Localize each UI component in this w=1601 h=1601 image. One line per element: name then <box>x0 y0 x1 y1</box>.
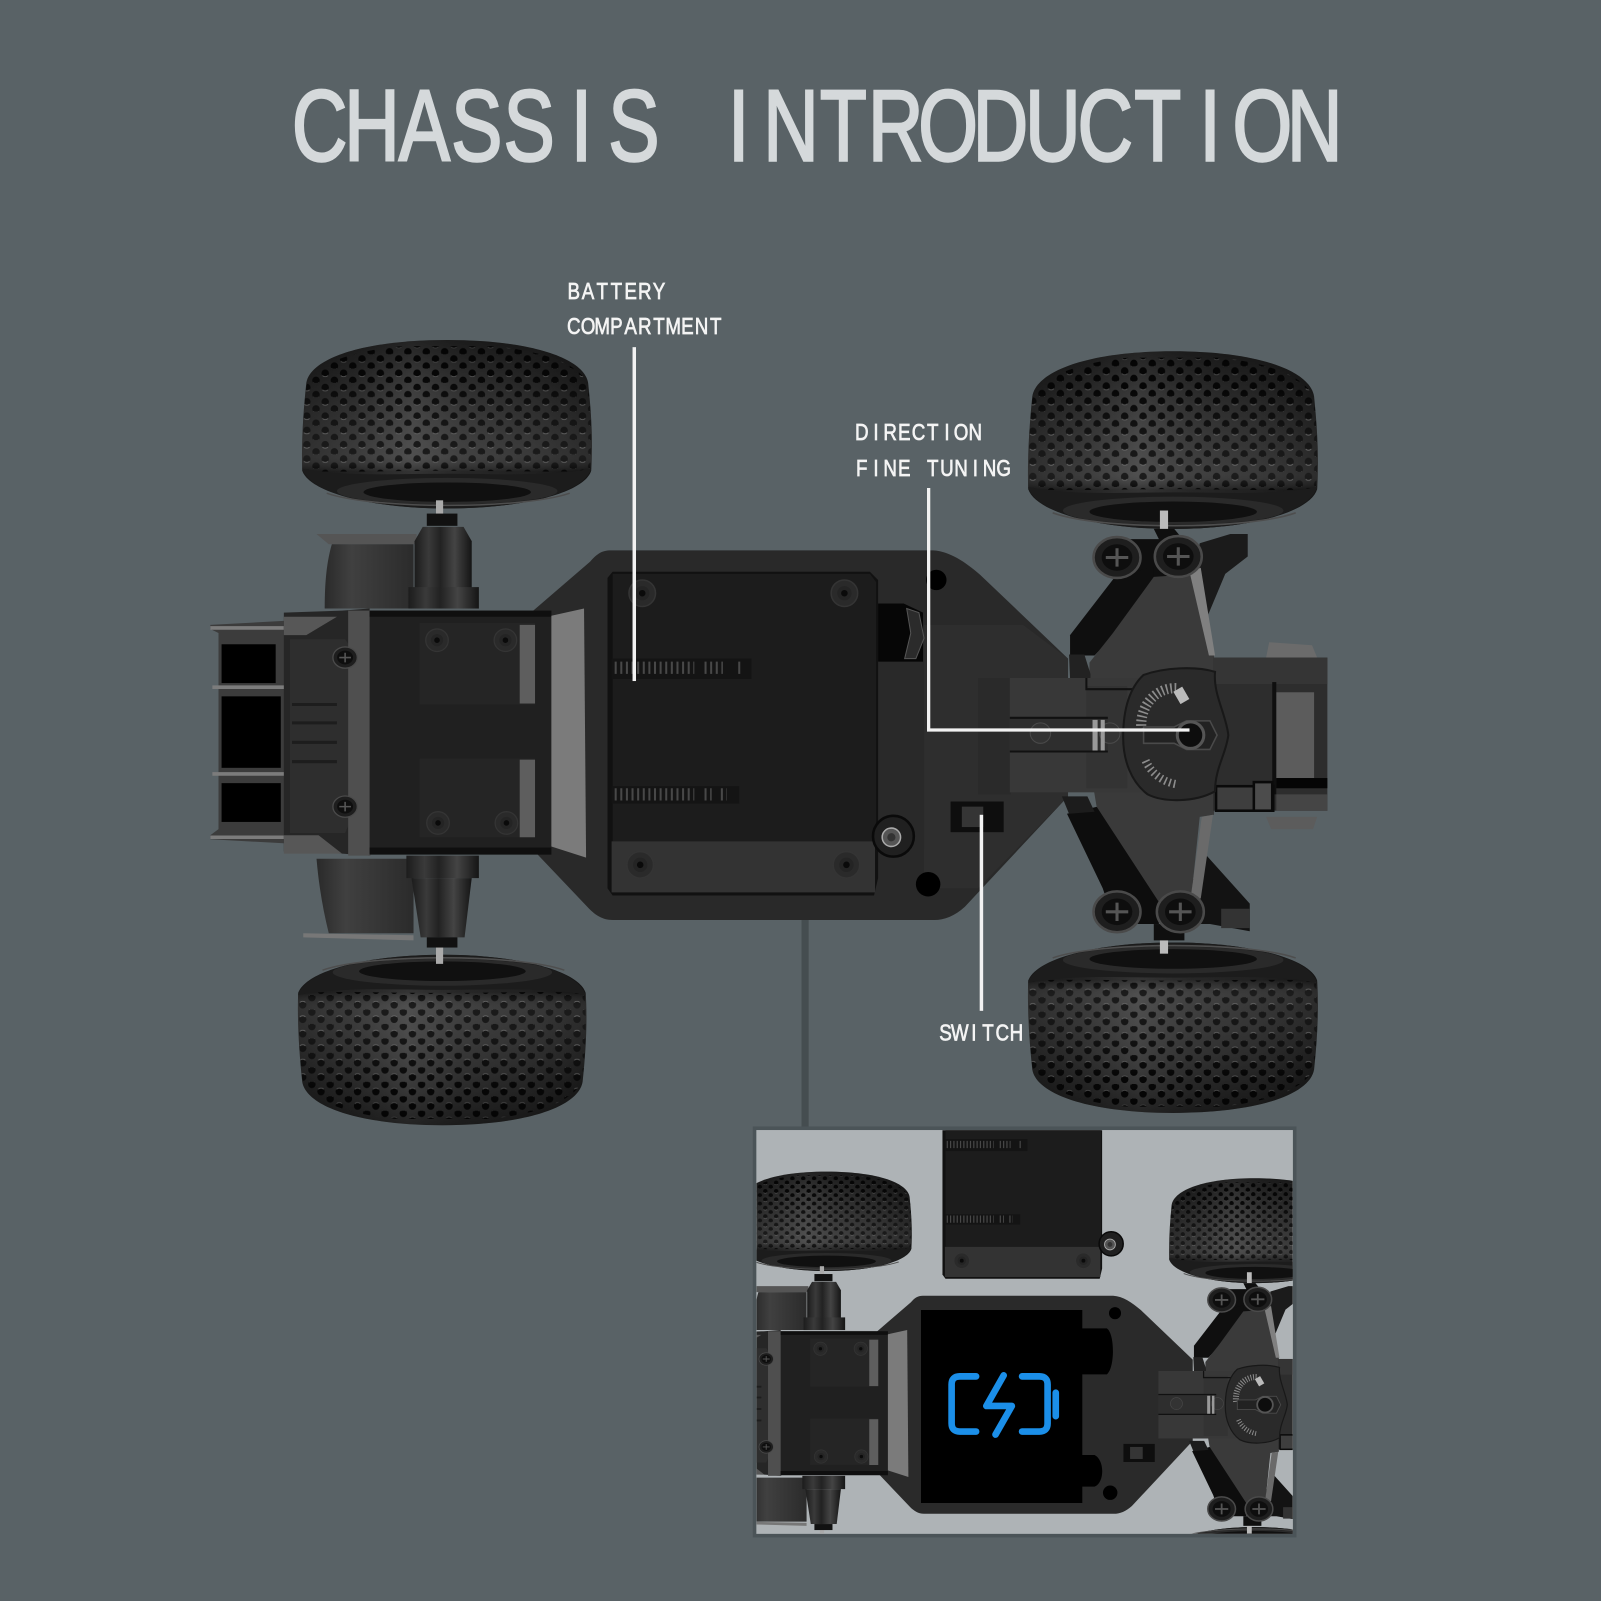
chassis plate <box>531 550 1068 920</box>
label: switch: SWITCH <box>939 1019 1023 1046</box>
icon: blue charging battery <box>952 1375 1056 1435</box>
rear axle with tires <box>210 340 592 1125</box>
inset panel: open battery compartment <box>753 1126 1296 1538</box>
inset chassis <box>756 1172 1293 1534</box>
open battery bay <box>921 1310 1113 1503</box>
leader line: battery compartment <box>633 347 636 681</box>
leader line: switch <box>980 815 983 1011</box>
battery compartment cover <box>608 572 914 895</box>
front axle with tires and steering dial <box>978 351 1327 1113</box>
label: direction fine tuning: DIRECTION <box>855 419 982 446</box>
power switch <box>951 802 1004 832</box>
removed battery cover <box>942 1130 1124 1279</box>
label: battery compartment: BATTERY <box>568 278 665 305</box>
label: battery compartment: COMPARTMENT <box>567 313 722 339</box>
leader line: direction fine tuning <box>929 488 1190 730</box>
title: CHASSIS INTRODUCTION <box>292 70 1343 183</box>
label: direction fine tuning <box>855 419 1011 481</box>
label: battery compartment <box>567 278 722 339</box>
main chassis view <box>210 340 1327 1125</box>
connector to inset <box>802 919 809 1129</box>
label: direction fine tuning: FINE TUNING <box>856 455 1011 481</box>
